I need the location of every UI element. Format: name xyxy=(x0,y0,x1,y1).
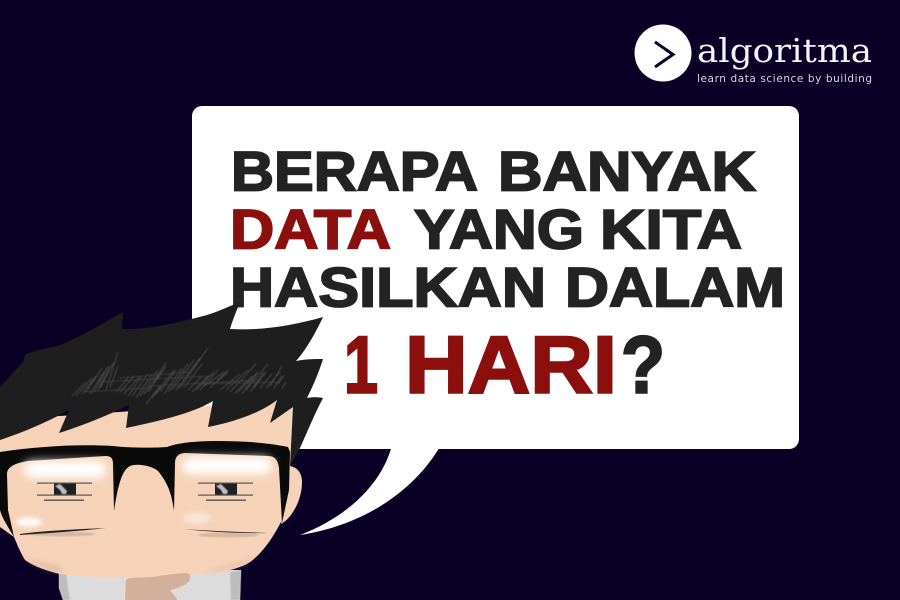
headline line 2 xyxy=(230,198,742,260)
scarf xyxy=(59,570,241,600)
headline line 2: DATA xyxy=(230,198,391,260)
headline line 1 xyxy=(231,140,756,202)
left under-eye line xyxy=(20,528,106,536)
glasses highlights xyxy=(16,457,272,527)
headline line 1: BERAPA xyxy=(231,140,478,202)
left eye xyxy=(37,482,92,501)
right under-eye line xyxy=(184,529,268,538)
headline line 4: HARI xyxy=(405,320,617,410)
right ear xyxy=(281,466,302,524)
character: boy with glasses xyxy=(0,302,323,600)
headline line 4: 1 xyxy=(344,320,378,410)
headline line 1: BANYAK xyxy=(498,140,756,202)
logo: algoritma xyxy=(634,24,872,85)
right eye xyxy=(198,482,253,501)
hair xyxy=(0,302,323,466)
speech bubble xyxy=(192,106,799,535)
headline line 3 xyxy=(230,256,785,318)
headline line 4: ? xyxy=(621,320,665,410)
hand on chin xyxy=(125,573,190,600)
logo wordmark: algoritma xyxy=(697,31,872,70)
headline line 3: DALAM xyxy=(565,256,785,318)
glasses frame xyxy=(0,441,290,537)
headline line 2: YANG xyxy=(414,198,584,260)
headline line 4 xyxy=(344,320,665,410)
logo icon: circle with chevron xyxy=(634,24,692,82)
logo tagline: learn data science by building xyxy=(697,73,872,85)
headline line 2: KITA xyxy=(600,198,742,260)
cheek shadows xyxy=(26,556,254,572)
hair highlight strokes xyxy=(72,348,286,404)
headline line 3: HASILKAN xyxy=(230,256,546,318)
face xyxy=(0,400,295,578)
headline question xyxy=(230,140,785,410)
